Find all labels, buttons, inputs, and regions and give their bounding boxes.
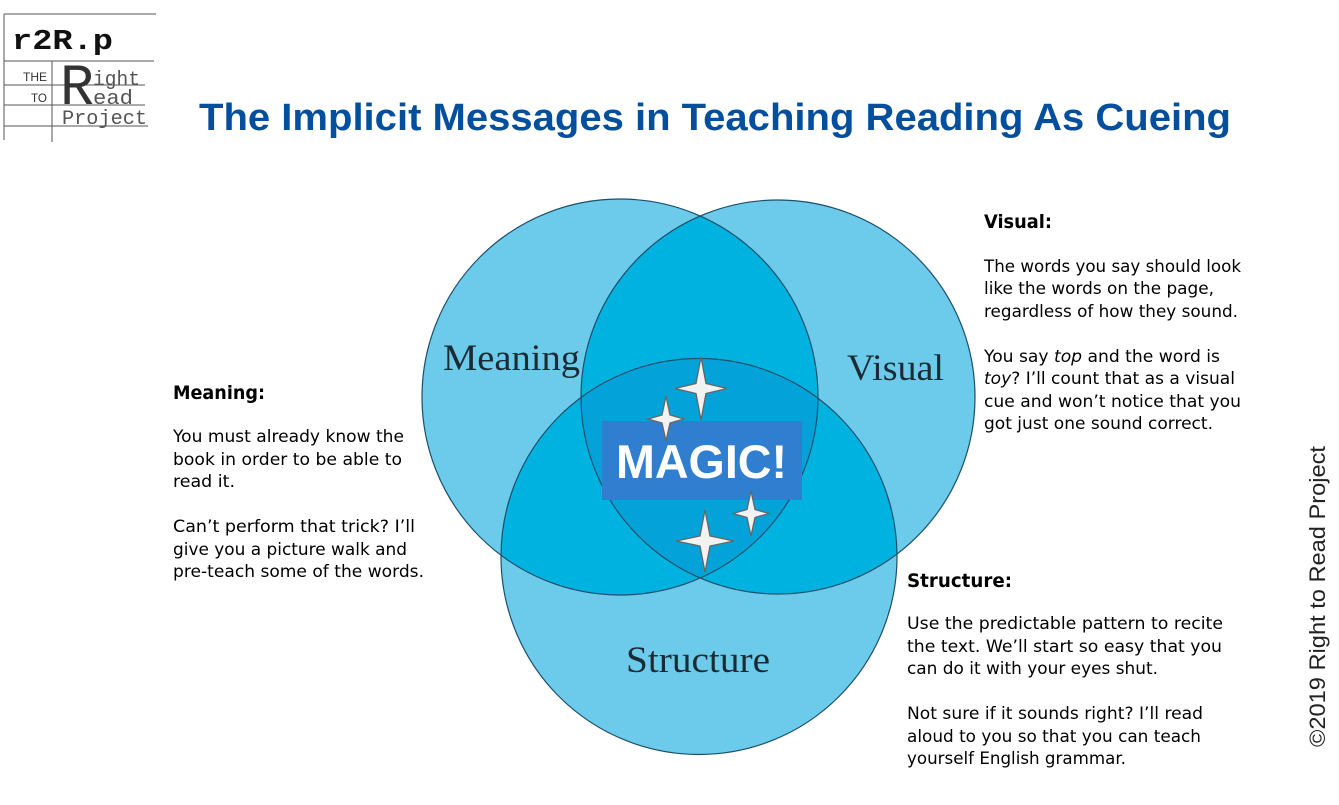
text block: Structure: the text. We’ll start so easy that you <box>907 637 1222 657</box>
text block: Visual: The words you say should look <box>983 257 1241 277</box>
text block: Meaning: give you a picture walk and <box>173 540 407 560</box>
logo: Right to Read Project: TO <box>31 91 47 105</box>
text block: Meaning: Meaning: <box>173 382 265 404</box>
venn label: Meaning: Meaning <box>443 338 580 379</box>
text block: Visual: like the words on the page, <box>984 279 1214 299</box>
text block: Structure: Use the predictable pattern to recite <box>907 614 1223 634</box>
text block: Meaning: pre-teach some of the words. <box>173 562 424 582</box>
icon: sparkle stars <box>648 357 769 572</box>
logo: Right to Read Project: ight <box>93 69 140 92</box>
logo: Right to Read Project <box>4 14 156 142</box>
text block: Meaning: Can’t perform that trick? I’ll <box>173 517 415 537</box>
logo: Right to Read Project: r2R.p <box>12 25 113 58</box>
overlap: Meaning and Visual <box>582 216 818 397</box>
title: The Implicit Messages in Teaching Reading As Cueing <box>199 97 1231 139</box>
text block: Meaning <box>172 382 424 582</box>
text block: Visual: got just one sound correct. <box>984 414 1213 434</box>
text block: Structure: Structure: <box>907 570 1012 592</box>
circle: Meaning <box>422 199 818 595</box>
magic box: MAGIC! <box>616 435 787 488</box>
text block: Visual: Visual: <box>984 211 1052 233</box>
overlap: all three <box>582 359 818 577</box>
logo: Right to Read Project: Project <box>62 108 147 131</box>
overlap: Visual and Structure <box>702 400 896 594</box>
text block: Structure: yourself English grammar. <box>907 749 1126 769</box>
text block: Structure <box>907 570 1223 769</box>
magic box <box>602 421 802 500</box>
text block: Meaning: read it. <box>173 472 235 492</box>
venn label: Structure: Structure <box>626 640 770 681</box>
copyright: ©2019 Right to Read Project <box>1305 446 1330 747</box>
text block: Visual: You say top and the word is <box>983 347 1220 367</box>
text block: Structure: aloud to you so that you can teach <box>907 727 1201 747</box>
logo: Right to Read Project: ead <box>93 88 133 111</box>
circle: Structure <box>501 358 897 754</box>
text block: Structure: can do it with your eyes shut. <box>907 659 1158 679</box>
text block: Visual <box>983 211 1241 434</box>
text block: Meaning: book in order to be able to <box>173 450 402 470</box>
text block: Meaning: You must already know the <box>172 427 404 447</box>
overlap: Meaning and Structure <box>502 398 698 594</box>
circle outlines <box>422 199 975 754</box>
logo: Right to Read Project: THE <box>23 70 47 84</box>
logo: Right to Read Project: R <box>60 57 94 122</box>
venn label: Visual: Visual <box>847 348 944 389</box>
text block: Visual: cue and won’t notice that you <box>984 392 1241 412</box>
text block: Visual: toy? I’ll count that as a visual <box>984 369 1235 389</box>
circle: Visual <box>581 200 975 594</box>
text block: Structure: Not sure if it sounds right? I’ll read <box>907 704 1203 724</box>
venn diagram <box>422 199 975 754</box>
text block: Visual: regardless of how they sound. <box>984 302 1238 322</box>
